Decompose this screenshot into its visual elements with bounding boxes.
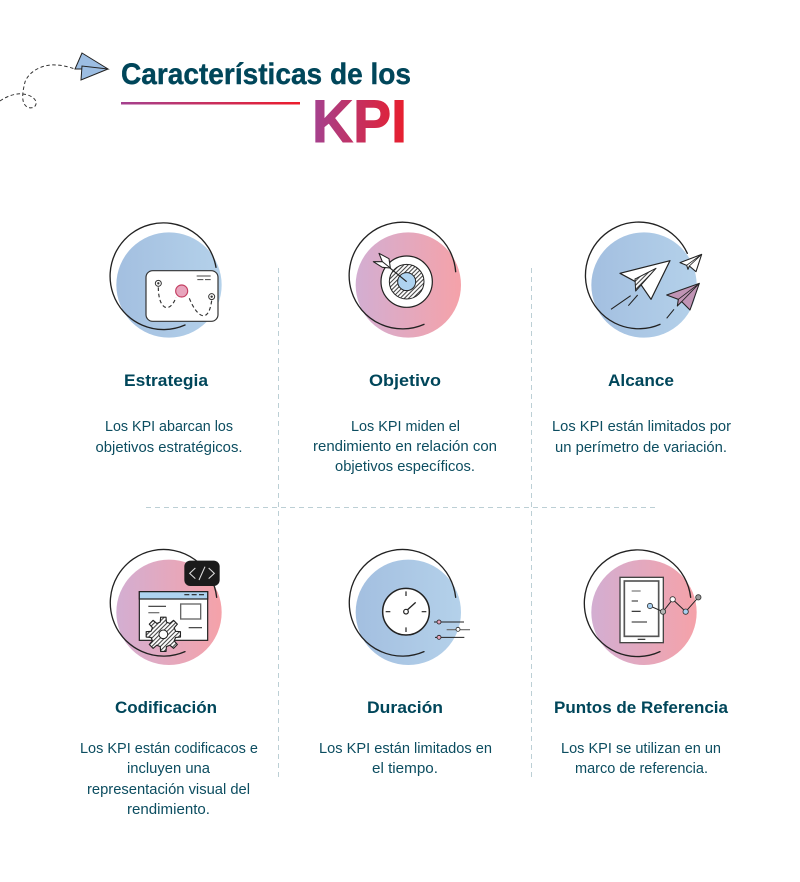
heading: Alcance: [608, 372, 674, 390]
description: Los KPI están codificacos e: [80, 741, 258, 757]
description: incluyen una: [127, 761, 211, 777]
description: [96, 419, 242, 456]
panel: Objetivo: [313, 222, 497, 475]
icon: paper plane with dashed trail: [0, 53, 108, 108]
description: [319, 741, 492, 777]
heading: Puntos de Referencia: [554, 699, 729, 717]
description: representación visual del: [87, 782, 250, 798]
description: un perímetro de variación.: [555, 440, 727, 456]
title underline: [121, 102, 300, 104]
title: [121, 58, 411, 155]
description: objetivos específicos.: [335, 459, 475, 475]
description: objetivos estratégicos.: [96, 440, 242, 456]
heading: KPI: KPI: [312, 88, 407, 155]
icon: code window with gear: [110, 549, 222, 665]
icon: paper planes: [585, 222, 702, 338]
description: Los KPI están limitados en: [319, 741, 492, 757]
description: el tiempo.: [372, 761, 438, 777]
panel: Duración: [319, 549, 492, 777]
icon: map with route: [110, 223, 222, 338]
description: Los KPI están limitados por: [552, 419, 731, 435]
description: [80, 741, 258, 818]
description: [313, 419, 497, 475]
heading: Codificación: [115, 699, 217, 717]
icon: clock with sliders: [349, 549, 470, 665]
panel: Puntos de Referencia: [554, 550, 729, 777]
heading: Objetivo: [369, 372, 441, 390]
heading: Estrategia: [124, 372, 209, 390]
panel: Estrategia: [96, 223, 242, 456]
description: marco de referencia.: [575, 761, 708, 777]
icon: tablet with line chart: [584, 550, 701, 665]
description: rendimiento en relación con: [313, 439, 497, 455]
description: Los KPI abarcan los: [105, 419, 233, 435]
icon: target with arrow: [349, 222, 461, 338]
panel: Alcance: [552, 222, 731, 456]
description: Los KPI miden el: [351, 419, 460, 435]
description: [552, 419, 731, 456]
description: Los KPI se utilizan en un: [561, 741, 721, 757]
panel: Codificación: [80, 549, 258, 818]
description: rendimiento.: [127, 802, 210, 818]
heading: Características de los: Características de los: [121, 58, 411, 91]
description: [561, 741, 721, 777]
heading: Duración: [367, 699, 443, 717]
